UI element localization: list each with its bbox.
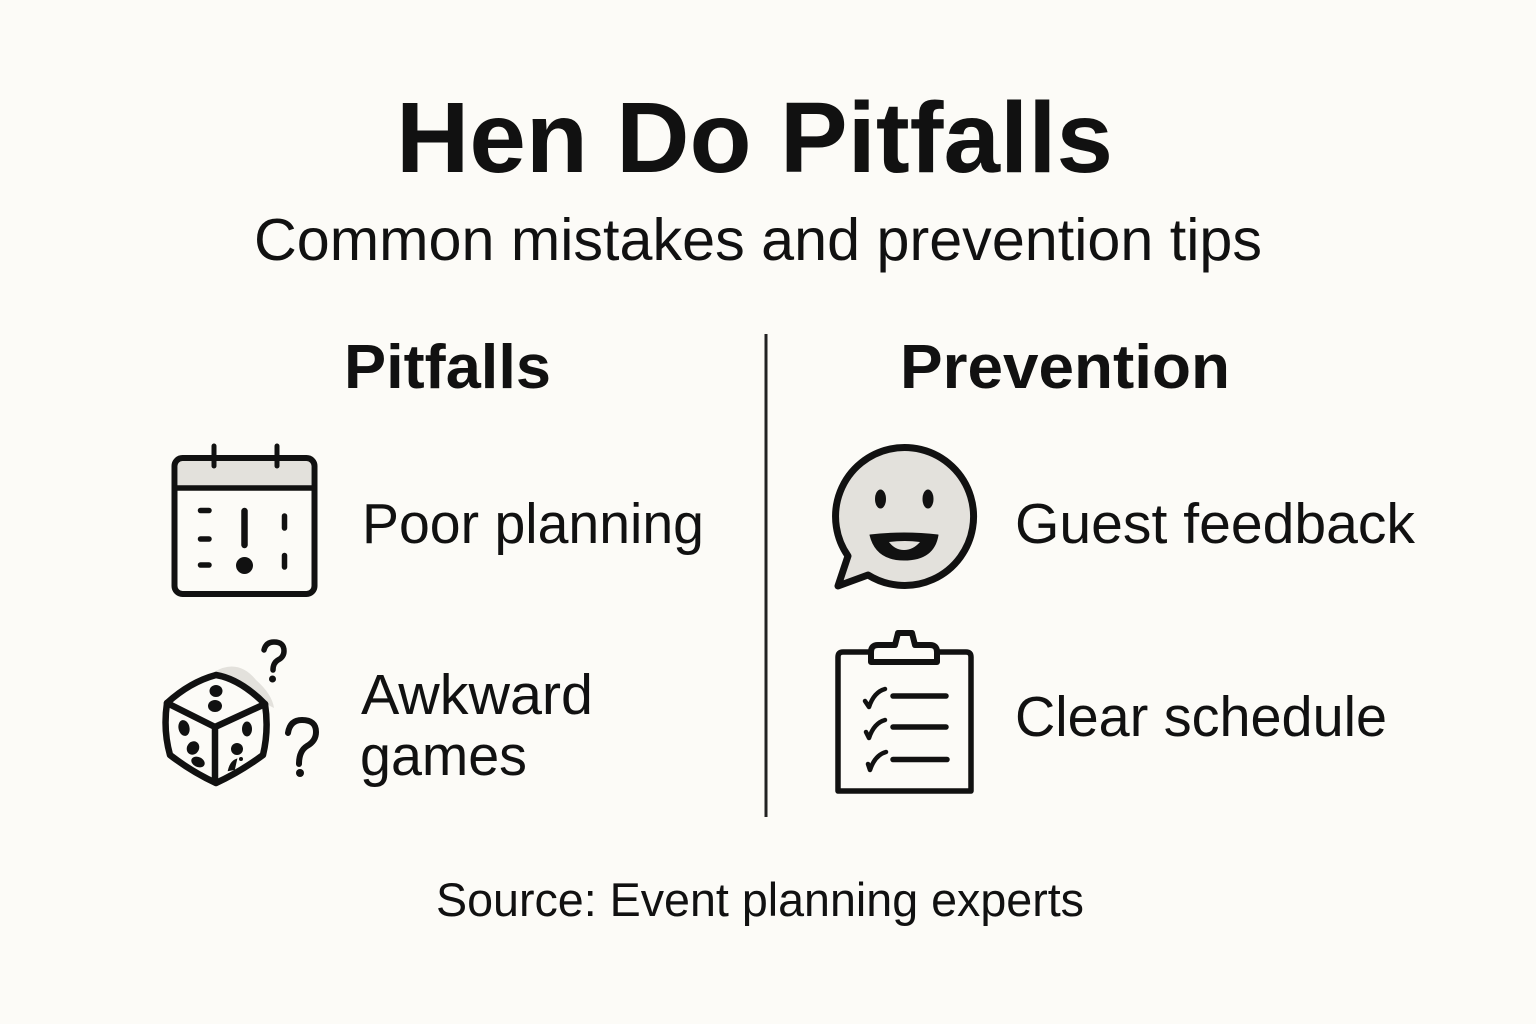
icon: calendar [174,446,314,594]
icon: smiling speech bubble [836,447,974,586]
text: awkward games: Awkward [361,663,593,727]
source note: Source: Event planning experts [436,873,1084,926]
text: awkward games: games [360,724,527,788]
icon: small question mark [264,642,284,682]
text: guest feedback: Guest feedback [1015,492,1415,556]
text: poor planning: Poor planning [362,492,704,556]
heading: prevention: Prevention [900,333,1230,402]
text: awkward games [360,663,593,788]
icon: large question mark [288,720,316,777]
subtitle: Common mistakes and prevention tips [254,207,1262,273]
icon: dice with question marks [166,642,316,783]
title: Hen Do Pitfalls [396,82,1113,194]
icon: clipboard checklist [838,633,971,791]
text: clear schedule: Clear schedule [1015,685,1387,749]
heading: pitfalls: Pitfalls [344,333,551,402]
